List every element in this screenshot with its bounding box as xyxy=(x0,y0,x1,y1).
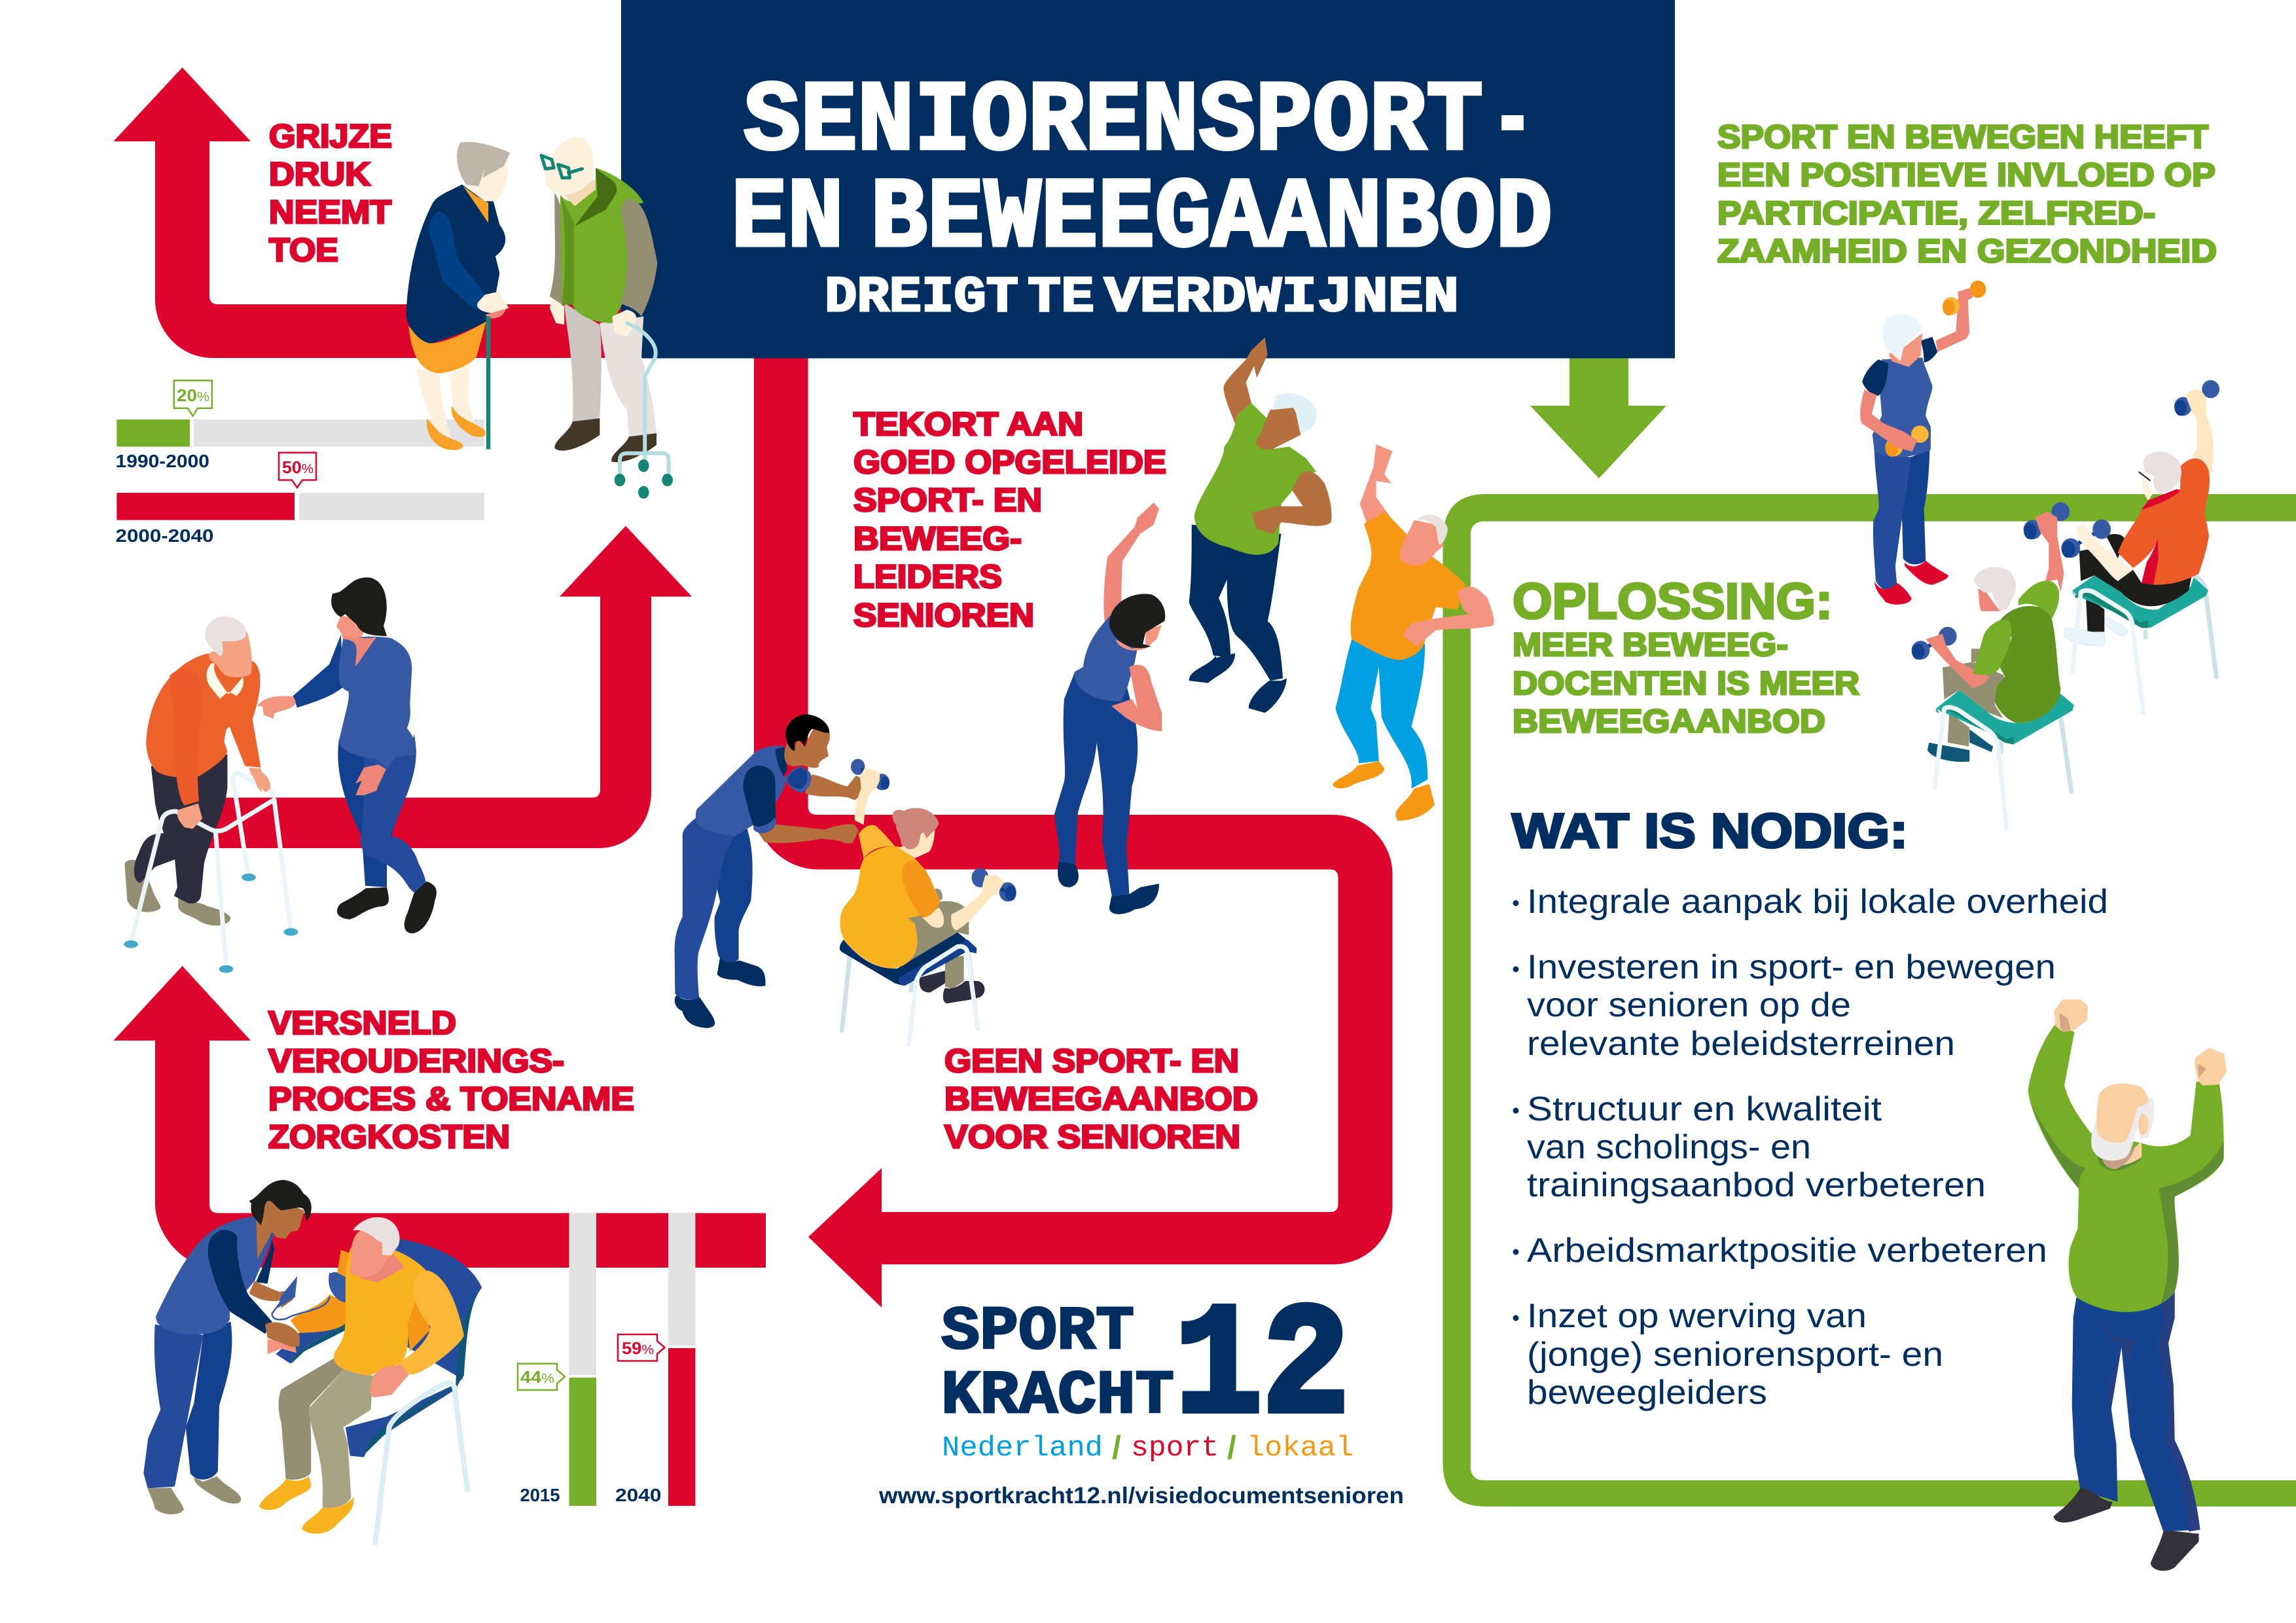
title: - xyxy=(1492,65,1534,179)
callout: 59% xyxy=(618,1334,665,1361)
logo: sportkracht12: KRACHT xyxy=(941,1362,1174,1431)
heading: versneld: PROCES & TOENAME xyxy=(268,1080,634,1117)
logo: sportkracht12: / xyxy=(1112,1429,1121,1466)
dumbbell: orange upper xyxy=(1943,281,1986,315)
arrow: versneld verouderingsproces xyxy=(113,966,766,1268)
heading: versneld: ZORGKOSTEN xyxy=(268,1118,510,1155)
heading: oplossing: OPLOSSING: xyxy=(1513,573,1833,630)
bullet list: Arbeidsmarktpositie verbeteren xyxy=(1527,1232,2047,1270)
subtitle xyxy=(825,270,1459,327)
callout: 20%: 20% xyxy=(177,385,209,405)
chart: zorgkosten bars: 2040 xyxy=(615,1485,661,1505)
dumbbell: side hand xyxy=(971,868,1016,902)
bullet list: relevante beleidsterreinen xyxy=(1527,1025,1955,1063)
bullet list: van scholings- en xyxy=(1527,1128,1811,1166)
heading: geen aanbod: GEEN SPORT- EN xyxy=(944,1043,1239,1079)
bullet list: (jonge) seniorensport- en xyxy=(1527,1336,1943,1374)
bullet list: trainingsaanbod verbeteren xyxy=(1527,1166,1986,1204)
heading: geen aanbod: BEWEEGAANBOD xyxy=(944,1080,1258,1117)
man with walking frame xyxy=(541,137,673,499)
callout: 50%: 50% xyxy=(282,457,314,477)
bullet list: beweegleiders xyxy=(1527,1374,1767,1412)
arrow: middle up xyxy=(207,526,692,848)
dumbbell: raised xyxy=(2174,380,2219,416)
heading: grijze druk xyxy=(269,118,392,268)
heading: oplossing xyxy=(1513,573,1859,740)
woman in blue xyxy=(1054,503,1165,914)
url: www.sportkracht12.nl/visiedocumentsenioren xyxy=(878,1483,1404,1508)
title: BEWEEGAANBOD xyxy=(870,162,1552,276)
logo: sportkracht12: / xyxy=(1227,1429,1236,1466)
heading: sport en bewegen heeft: ZAAMHEID EN GEZONDHEID xyxy=(1717,233,2217,270)
bullet list xyxy=(1513,883,2108,1412)
heading: wat is nodig: WAT IS NODIG: xyxy=(1512,804,1908,858)
dumbbell: raised hand xyxy=(851,758,889,791)
trainer xyxy=(675,714,863,1028)
heading: geen aanbod xyxy=(944,1043,1258,1155)
dumbbell: orange lower xyxy=(1860,389,1929,457)
logo: sportkracht12: lokaal xyxy=(1247,1432,1354,1465)
heading: tekort: BEWEEG- xyxy=(853,520,1022,557)
woman in green xyxy=(1189,337,1331,713)
heading: oplossing: BEWEEGAANBOD xyxy=(1513,703,1825,740)
heading: sport en bewegen heeft: EEN POSITIEVE INVLOED OP xyxy=(1717,156,2215,193)
chart: grijze druk bars: 2000-2040 xyxy=(115,526,213,546)
dumbbell: raised xyxy=(2024,502,2070,539)
figure: dancing seniors xyxy=(1054,337,1494,914)
heading: tekort: LEIDERS xyxy=(853,558,1002,595)
title: SENIORENSPORT xyxy=(744,65,1483,179)
woman with cane xyxy=(406,142,510,450)
callout: 44%: 44% xyxy=(520,1367,554,1387)
dumbbell: low xyxy=(1912,627,1957,660)
chart: grijze druk bars xyxy=(115,380,484,546)
callout: 59%: 59% xyxy=(622,1338,654,1358)
figure: man with rollator frame and carer xyxy=(124,577,437,973)
heading: versneld xyxy=(268,1005,634,1155)
seated patient xyxy=(259,1217,482,1543)
senior in green shirt xyxy=(1912,502,2074,829)
arrow: grijze druk xyxy=(113,67,628,358)
heading: grijze druk: GRIJZE xyxy=(269,118,392,154)
heading: grijze druk: NEEMT xyxy=(269,194,391,230)
subtitle: VERDWIJNEN xyxy=(1104,270,1459,327)
chart: zorgkosten bars xyxy=(518,1213,695,1506)
man in orange xyxy=(1333,444,1494,821)
figure: standing instructor and two seated seniors with dumbbells xyxy=(1860,281,2219,829)
heading: sport en bewegen heeft: SPORT EN BEWEGEN HEEFT xyxy=(1717,118,2208,155)
figure: trainer with seated woman and dumbbells xyxy=(675,714,1016,1045)
senior in orange shirt xyxy=(2061,380,2219,713)
logo: sportkracht12: Nederland xyxy=(942,1432,1103,1465)
heading: tekort: TEKORT AAN xyxy=(853,406,1083,442)
arrow: green down xyxy=(1530,353,1666,478)
heading: oplossing: DOCENTEN IS MEER xyxy=(1513,665,1859,702)
figure: nurse and seated patient xyxy=(143,1180,482,1543)
bullet list: Structuur en kwaliteit xyxy=(1527,1090,1882,1128)
chart: zorgkosten bars: 2015 xyxy=(520,1485,560,1505)
callout: 44% xyxy=(518,1364,565,1390)
nurse xyxy=(143,1180,329,1514)
title xyxy=(731,65,1552,276)
heading: tekort: SENIOREN xyxy=(853,597,1034,633)
logo: sportkracht12: SPORT xyxy=(941,1298,1134,1367)
old man xyxy=(124,616,298,973)
panel: green solution frame xyxy=(1443,494,2296,1507)
figure: cheering man xyxy=(2028,999,2227,1571)
heading: oplossing: MEER BEWEEG- xyxy=(1513,626,1788,663)
logo: sportkracht12: sport xyxy=(1131,1432,1219,1465)
seated woman xyxy=(840,758,1016,1045)
bullet list: Investeren in sport- en bewegen xyxy=(1527,948,2056,986)
heading: geen aanbod: VOOR SENIOREN xyxy=(944,1118,1240,1155)
chart: grijze druk bars: 1990-2000 xyxy=(115,451,209,471)
title: EN xyxy=(731,162,844,276)
logo: sportkracht12 xyxy=(941,1280,1354,1466)
heading: sport en bewegen heeft: PARTICIPATIE, ZELFRED- xyxy=(1717,195,2155,232)
carer xyxy=(257,577,437,933)
callout: 20% xyxy=(174,380,212,416)
header panel xyxy=(621,0,1675,359)
subtitle: DREIGT xyxy=(825,270,1018,327)
bullet list: Inzet op werving van xyxy=(1527,1297,1867,1335)
heading: tekort xyxy=(853,406,1166,633)
heading: grijze druk: TOE xyxy=(269,232,338,268)
standing instructor xyxy=(1860,281,1986,605)
bullet list: Integrale aanpak bij lokale overheid xyxy=(1527,883,2108,921)
heading: grijze druk: DRUK xyxy=(269,156,370,192)
logo: sportkracht12: 12 xyxy=(1175,1280,1350,1458)
heading: tekort: GOED OPGELEIDE xyxy=(853,444,1166,480)
subtitle: TE xyxy=(1028,270,1094,327)
callout: 50% xyxy=(279,453,316,488)
bullet list: voor senioren op de xyxy=(1527,986,1851,1024)
heading: versneld: VERSNELD xyxy=(268,1005,456,1041)
heading: sport en bewegen heeft xyxy=(1717,118,2217,270)
arrow: tekort and geen aanbod xyxy=(754,353,1393,1308)
dumbbell: low xyxy=(2061,520,2111,558)
heading: tekort: SPORT- EN xyxy=(853,482,1042,518)
heading: versneld: VEROUDERINGS- xyxy=(268,1043,564,1079)
figure: woman with cane and man with walking frame xyxy=(406,137,673,499)
